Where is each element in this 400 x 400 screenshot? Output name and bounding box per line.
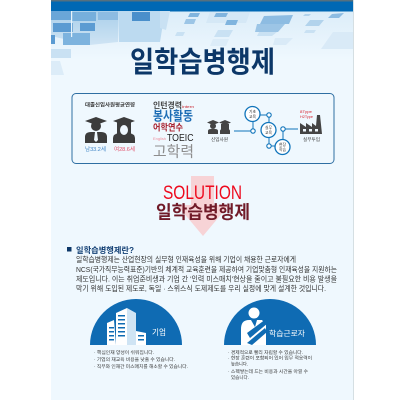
step: on-site learning: 현장	[279, 142, 286, 147]
learner benefit list	[228, 349, 312, 381]
body text: NCS(국가직무능력표준)기반의 체계적 교육훈련을 제공하여 기업맞춤형 인재육성을 지원하는	[76, 265, 337, 274]
section: definition	[67, 245, 337, 293]
word cloud: credentials: intern	[182, 104, 194, 109]
dome: company	[90, 299, 182, 345]
dome label: 학습근로자	[269, 328, 305, 338]
bullet square	[67, 247, 72, 252]
label: new hires: 신입사원	[211, 136, 228, 143]
body text: 막기 위해 도입된 제도로, 독일 · 스위스식 도제제도를 우리 실정에 맞게 설계한 것입니다.	[76, 284, 326, 293]
word cloud: credentials: 인턴경력	[153, 100, 182, 110]
icon: new hires	[207, 120, 231, 134]
company benefit list: · 기업의 재교육 비용을 낮출 수 있습니다.	[94, 356, 175, 363]
word cloud: credentials	[153, 100, 194, 160]
solution label: SOLUTION	[163, 182, 242, 204]
word cloud: credentials: TOEIC	[167, 132, 194, 144]
body text	[76, 255, 337, 293]
page panel background	[51, 0, 354, 400]
icon: female graduate	[113, 117, 135, 143]
step: on-site learning	[275, 140, 290, 154]
icon: person with crossed arms	[241, 308, 268, 345]
step: practical training: 교육	[265, 130, 272, 135]
panel: current situation	[72, 94, 334, 164]
female age label: 여28.6세	[114, 145, 135, 153]
word cloud: credentials: English	[153, 137, 166, 141]
solution title: 일학습병행제	[156, 202, 250, 222]
dome: learner	[224, 299, 316, 345]
learner benefit list: · 경제적으로 빨리 자립할 수 있습니다.	[228, 349, 303, 356]
flow: new hire to work deployment	[207, 106, 322, 154]
step: on-site learning: 학습	[279, 147, 286, 152]
icon: factory: 8Type	[300, 110, 312, 114]
step: basic training: 교육	[249, 114, 256, 119]
learner benefit list: · 현장 훈련이 포함되어 있어 입무 적응력이	[228, 354, 312, 362]
dome label: 기업	[152, 328, 166, 337]
male age label: 남33.2세	[85, 145, 106, 153]
header band	[51, 0, 353, 60]
company benefit list: · 핵심인재 양성이 쉬워집니다.	[94, 349, 154, 356]
panel: company benefits	[90, 299, 188, 370]
step: basic training	[245, 106, 260, 122]
body text: 일학습병행제는 산업현장의 실무형 인재육성을 위해 기업이 채용한 근로자에게	[76, 255, 296, 264]
body text: 제도입니다. 이는 취업준비생과 기업 간 '인력 미스매치'현상을 줄이고 불필요한 비용 발생을	[76, 274, 337, 284]
panel frame	[72, 94, 334, 164]
word cloud: credentials: 고학력	[153, 144, 194, 160]
title: 일학습병행제	[130, 46, 275, 79]
icon: factory: H2Type	[300, 115, 313, 119]
solution arrow	[177, 176, 229, 236]
word cloud: credentials: 봉사활동	[153, 108, 193, 124]
panel: work-study learner benefits	[224, 299, 316, 381]
word cloud: credentials: 어학연수	[153, 122, 183, 132]
icon: male graduate	[85, 117, 107, 143]
learner benefit list: 있습니다.	[231, 374, 249, 381]
icon: factory	[300, 110, 322, 134]
company benefit list	[94, 349, 188, 370]
label: deployment: 실무투입	[303, 136, 320, 143]
step: practical training	[261, 122, 276, 138]
learner benefit list: 높습니다.	[231, 360, 248, 368]
step: basic training: 기초	[249, 109, 256, 114]
company benefit list: · 직무와 인재간 미스매치를 해소할 수 있습니다.	[94, 363, 188, 370]
icon: buildings	[107, 308, 146, 345]
section heading: 일학습병행제란?	[76, 245, 134, 255]
learner benefit list: · 스펙쌓는데 드는 비용과 시간을 아낄 수	[228, 368, 309, 375]
connector lines	[234, 113, 298, 148]
header mosaic pattern	[51, 11, 353, 75]
caption: average age: 대졸신입사원평균연령	[85, 100, 135, 108]
step: practical training: 실무	[265, 125, 272, 130]
